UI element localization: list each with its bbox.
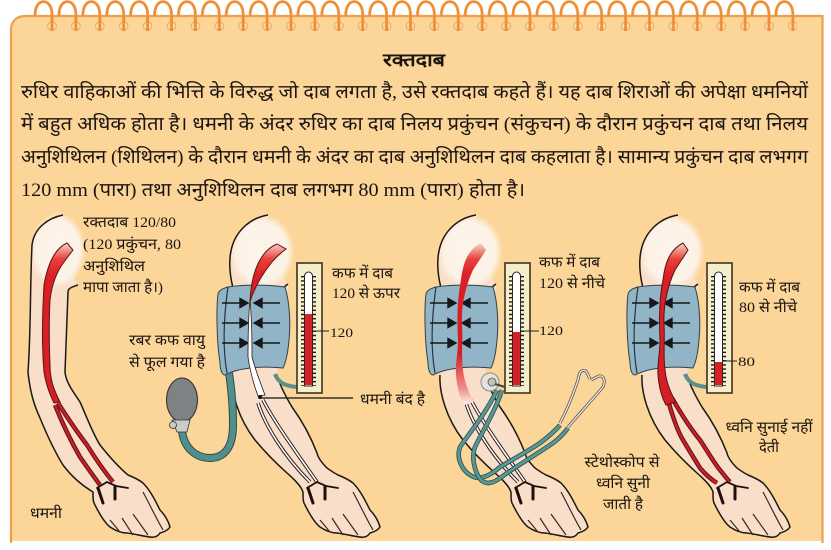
text block: definition of blood pressure xyxy=(21,80,809,202)
label: blood pressure reading xyxy=(83,215,181,296)
label: sound heard through stethoscope: जाती है xyxy=(603,495,644,513)
text block: definition of blood pressure: रुधिर वाहिकाओं की भित्ति के विरुद्ध जो दाब लगता है, उसे रक्तदाब कहते हैं। यह दाब शिराओं की अपेक्षा धमनियों xyxy=(21,80,809,103)
label: gauge value 80: 80 xyxy=(738,354,755,369)
icon: forearm arteries xyxy=(668,398,730,483)
illustration 1: normal arm with artery xyxy=(28,212,170,537)
icon: arm xyxy=(639,214,790,537)
icon: pressure gauge xyxy=(707,263,737,393)
icon: cuff xyxy=(627,285,700,375)
label: cuff pressure below 120: कफ में दाब xyxy=(539,253,600,271)
label: rubber cuff inflated xyxy=(129,333,206,372)
label: cuff pressure above 120 xyxy=(332,264,401,302)
label: cuff pressure below 80 xyxy=(739,278,800,316)
icon: artery xyxy=(456,243,486,405)
label: no sound heard xyxy=(726,418,814,456)
icon: arm xyxy=(437,214,588,537)
icon: stethoscope xyxy=(459,370,604,483)
label: blood pressure reading: अनुशिथिल xyxy=(83,257,146,276)
text block: definition of blood pressure: अनुशिथिलन (शिथिलन) के दौरान धमनी के अंदर का दाब अनुशिथिलन दाब कहलाता है। सामान्य प्रकुंचन दाब लभगग xyxy=(21,145,808,169)
icon: cuff hose xyxy=(275,374,297,387)
label: cuff pressure below 120 xyxy=(539,253,605,292)
spiral binding xyxy=(33,0,797,34)
text block: definition of blood pressure: में बहुत अधिक होता है। धमनी के अंदर रुधिर का दाब निलय प्रकुंचन (संकुचन) के दौरान प्रकुंचन दाब तथा निलय xyxy=(21,112,809,137)
label: cuff pressure above 120: 120 से ऊपर xyxy=(332,284,401,302)
illustration 4: pressure below 80, no sound xyxy=(627,214,790,537)
label: cuff pressure below 80: 80 से नीचे xyxy=(739,298,797,316)
label: artery: धमनी xyxy=(30,504,63,522)
icon: artery wedge and closed section xyxy=(248,244,286,399)
icon: pressure gauge xyxy=(297,263,329,393)
label: artery closed: धमनी बंद है xyxy=(360,390,426,408)
label: gauge value 120: 120 xyxy=(539,323,563,338)
label: rubber cuff inflated: से फूल गया है xyxy=(129,353,206,372)
label: blood pressure reading: रक्तदाब 120/80 xyxy=(83,215,176,231)
label: artery closed pointer xyxy=(260,397,353,399)
label: blood pressure reading: (120 प्रकुंचन, 80 xyxy=(83,236,181,254)
label: cuff pressure below 80: कफ में दाब xyxy=(739,278,800,296)
label: cuff pressure below 120: 120 से नीचे xyxy=(539,274,605,292)
icon: artery xyxy=(658,243,688,405)
icon: blood pressure cuff xyxy=(217,285,290,375)
icon: cuff xyxy=(425,285,498,375)
icon: pressure gauge xyxy=(505,263,539,393)
label: cuff pressure above 120: कफ में दाब xyxy=(332,264,393,282)
label: sound heard through stethoscope: ध्वनि सुनी xyxy=(596,474,651,493)
illustration 2: cuff inflated, artery closed xyxy=(166,214,380,537)
illustration 3: pressure below 120, stethoscope xyxy=(425,214,604,537)
text block: definition of blood pressure: 120 mm (पारा) तथा अनुशिथिलन दाब लगभग 80 mm (पारा) होता है। xyxy=(21,178,525,202)
label: no sound heard: ध्वनि सुनाई नहीं xyxy=(726,418,814,437)
icon: cuff hose xyxy=(685,374,707,387)
label: sound heard through stethoscope: स्टेथोस्कोप से xyxy=(584,453,660,471)
icon: arm xyxy=(229,214,380,537)
icon: arm outline xyxy=(28,212,170,537)
title: रक्तदाब xyxy=(382,50,446,70)
icon: red artery xyxy=(42,243,128,503)
label: gauge value 120: 120 xyxy=(330,325,353,340)
label: blood pressure reading: मापा जाता है।) xyxy=(83,278,163,296)
label: no sound heard: देती xyxy=(759,438,780,456)
label: sound heard through stethoscope xyxy=(584,453,660,513)
icon: squeeze bulb and tube xyxy=(166,373,233,458)
label: rubber cuff inflated: रबर कफ वायु xyxy=(129,333,206,350)
